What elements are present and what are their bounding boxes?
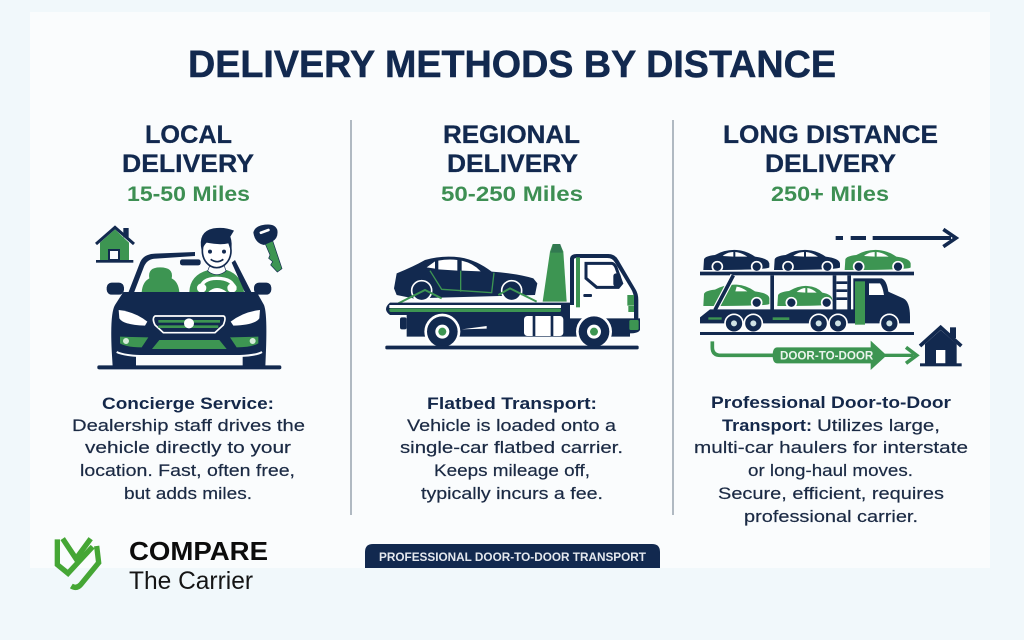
icon: car with driver, house and key <box>96 224 282 369</box>
heading: long distance delivery <box>723 121 938 178</box>
panel: local delivery <box>72 121 305 503</box>
text: professional door-to-door transport: professional carrier. <box>744 507 918 526</box>
heading: regional delivery: DELIVERY <box>447 150 578 178</box>
icon: multi-car hauler with door-to-door arrow and house: DOOR-TO-DOOR <box>780 349 874 362</box>
heading: long distance delivery: LONG DISTANCE <box>723 121 938 149</box>
heading: local delivery <box>122 121 254 178</box>
text: professional door-to-door transport: Utilizes large, <box>817 416 940 435</box>
heading: local delivery: DELIVERY <box>122 150 254 178</box>
banner: professional door-to-door transport: PROFESSIONAL DOOR-TO-DOOR TRANSPORT <box>379 552 646 564</box>
icon: green shield logo <box>57 539 99 587</box>
distance: 250+ miles: 250+ Miles <box>771 183 889 206</box>
text: professional door-to-door transport: Professional Door-to-Door <box>711 393 951 412</box>
text: professional door-to-door transport: multi-car haulers for interstate <box>694 438 968 457</box>
text: concierge service: Dealership staff drives the <box>72 416 305 435</box>
logo: compare the carrier <box>57 536 268 595</box>
text: concierge service: location. Fast, often free, <box>80 461 295 480</box>
icon: multi-car hauler with door-to-door arrow and house <box>700 229 962 370</box>
text: professional door-to-door transport: Transport: <box>722 416 812 435</box>
distance: 50-250 miles: 50-250 Miles <box>441 183 583 206</box>
distance: 15-50 miles: 15-50 Miles <box>127 183 250 206</box>
heading: local delivery: LOCAL <box>145 121 232 149</box>
heading: regional delivery <box>443 121 580 178</box>
text: flatbed transport: Keeps mileage off, <box>434 461 590 480</box>
panel: regional delivery <box>385 121 640 503</box>
heading: long distance delivery: DELIVERY <box>765 150 896 178</box>
text: professional door-to-door transport: Secure, efficient, requires <box>718 484 944 503</box>
logo: compare the carrier: The Carrier <box>129 567 253 595</box>
icon: flatbed tow truck with car <box>385 244 640 350</box>
banner: professional door-to-door transport <box>365 544 660 568</box>
title: DELIVERY METHODS BY DISTANCE <box>188 44 836 86</box>
text: professional door-to-door transport: or long-haul moves. <box>748 461 913 480</box>
text: flatbed transport: Flatbed Transport: <box>427 394 597 413</box>
text: concierge service <box>72 394 305 503</box>
text: concierge service: Concierge Service: <box>102 394 274 413</box>
text: flatbed transport: typically incurs a fee. <box>421 484 603 503</box>
text: professional door-to-door transport <box>694 393 968 526</box>
text: flatbed transport: Vehicle is loaded onto a <box>407 416 617 435</box>
text: concierge service: vehicle directly to your <box>85 438 291 457</box>
panel: long distance delivery <box>694 121 968 526</box>
text: flatbed transport: single-car flatbed carrier. <box>400 438 623 457</box>
text: flatbed transport <box>400 394 623 503</box>
heading: regional delivery: REGIONAL <box>443 121 580 149</box>
text: concierge service: but adds miles. <box>124 484 252 503</box>
logo: compare the carrier: COMPARE <box>129 536 268 566</box>
